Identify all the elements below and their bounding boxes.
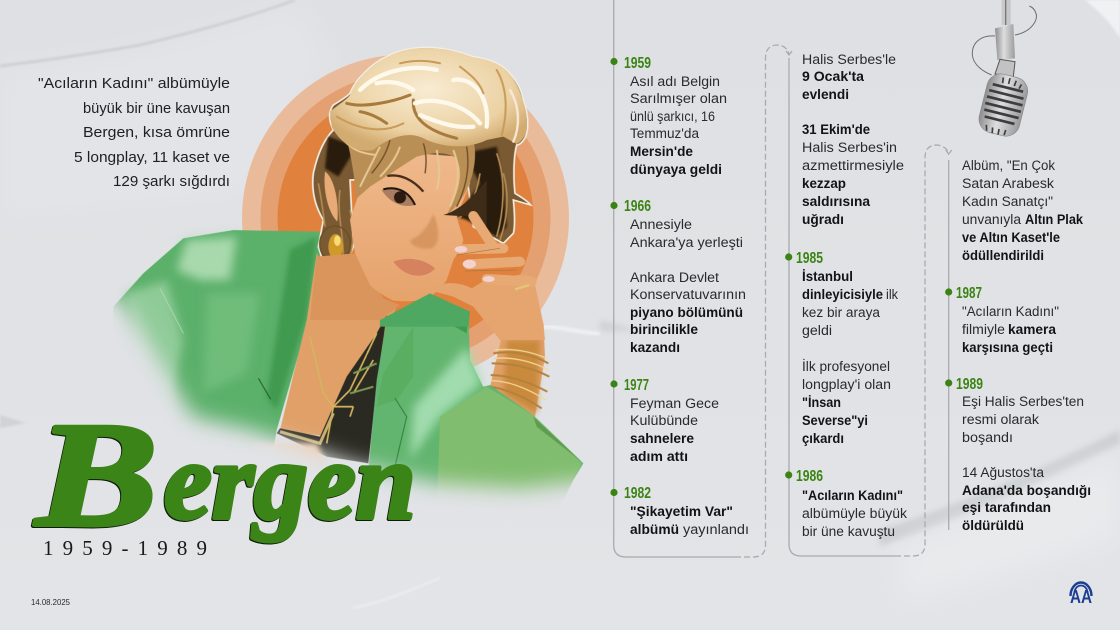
entry attack [802, 122, 904, 227]
intro text: 129 şarkı sığdırdı [113, 173, 230, 190]
fringe [343, 130, 475, 215]
entry 1984 marriage: 9 Ocak'ta [802, 69, 865, 84]
entry 1985: 1985 [796, 250, 823, 267]
entry 1959: Sarılmışer olan [630, 91, 727, 106]
entry 1987: filmiyle [962, 322, 1005, 337]
subtitle: years: 1959-1989 [43, 536, 207, 560]
entry 1985: çıkardı [802, 431, 844, 446]
entry 1977: Feyman Gece [630, 396, 719, 411]
title: Bergen: ergen [164, 420, 416, 542]
hair silhouette [313, 47, 531, 263]
intro text: büyük bir üne kavuşan [83, 100, 230, 117]
entry 1966 [610, 198, 746, 355]
title: Bergen [34, 392, 416, 558]
entry 1982 [610, 485, 749, 537]
orange circle behind portrait [242, 54, 569, 382]
title: Bergen: B [34, 392, 158, 558]
entry 1985: İlk profesyonel [802, 359, 890, 374]
entry 1985 [785, 250, 898, 446]
entry 1959: ünlü şarkıcı, 16 [630, 109, 715, 124]
lips [393, 259, 435, 276]
entry 1966: Ankara'ya yerleşti [630, 235, 743, 250]
date: 14.08.2025 [31, 598, 71, 607]
intro text [38, 75, 230, 190]
jacket left panel [113, 230, 320, 445]
entry 1966: piyano bölümünü [630, 305, 743, 320]
intro text: 5 longplay, 11 kaset ve [74, 149, 230, 166]
neck [310, 253, 400, 320]
entry 1977: adım attı [630, 449, 688, 464]
neck and chest [280, 253, 397, 437]
portrait: woman in green jacket [113, 230, 583, 513]
strand over face [443, 180, 487, 227]
portrait head: hair and face [310, 47, 545, 340]
entry 1989: Eşi Halis Serbes'ten [962, 394, 1084, 409]
entry 1982: 1982 [624, 485, 651, 502]
nose [410, 213, 438, 249]
hand and fingers [432, 216, 545, 340]
entry 1959: Asıl adı Belgin [630, 74, 720, 89]
entry 1985: dinleyicisiyle [802, 287, 883, 302]
entry album award: Satan Arabesk [962, 176, 1054, 191]
entry 1985: "İnsan [802, 395, 841, 410]
entry 1987: "Acıların Kadını" [962, 304, 1059, 319]
entry attack: kezzap [802, 176, 846, 191]
entry 1989 [945, 376, 1091, 533]
entry 1985: kez bir araya [802, 305, 880, 320]
entry 1986: "Acıların Kadını" [802, 488, 903, 503]
entry 1977: Kulübünde [630, 413, 698, 428]
entry 1982: "Şikayetim Var" [630, 504, 733, 519]
entry album award: Altın Plak [1025, 212, 1083, 227]
entry album award: Kadın Sanatçı" [962, 194, 1053, 209]
entry 1982: yayınlandı [683, 522, 749, 537]
entry 1966: Ankara Devlet [630, 270, 719, 285]
timeline column 3 [945, 158, 1091, 533]
entry 1985: ilk [886, 287, 898, 302]
hair curls [337, 61, 518, 142]
logo: AA: AA [1070, 587, 1092, 607]
hair strands at sides [318, 153, 507, 260]
entry 1989: resmi olarak [962, 412, 1039, 427]
timeline column 1 [610, 55, 749, 537]
entry 1986: 1986 [796, 468, 823, 485]
wrist and bracelets [473, 307, 549, 427]
entry 1984 marriage [802, 52, 896, 102]
icon: vintage microphone [972, 0, 1036, 139]
entry album award [962, 158, 1083, 263]
intro text: Bergen, kısa ömrüne [83, 124, 230, 141]
entry 1959: dünyaya geldi [630, 162, 722, 177]
collar in front of neck [380, 293, 470, 327]
entry 1989: eşi tarafından [962, 500, 1051, 515]
entry attack: azmettirmesiyle [802, 158, 904, 173]
entry 1966: birincilikle [630, 322, 698, 337]
intro text: "Acıların Kadını" albümüyle [38, 75, 230, 92]
entry attack: 31 Ekim'de [802, 122, 870, 137]
entry 1977: 1977 [624, 377, 649, 394]
timeline connector lines [614, 0, 952, 557]
eye and brow [382, 175, 423, 206]
entry 1984 marriage: Halis Serbes'le [802, 52, 896, 67]
entry album award: ödüllendirildi [962, 248, 1044, 263]
entry 1986: albümüyle büyük [802, 506, 907, 521]
entry 1989: Adana'da boşandığı [962, 483, 1091, 498]
entry 1959: Mersin'de [630, 144, 693, 159]
entry 1989: 1989 [956, 376, 983, 393]
entry 1977 [610, 377, 719, 464]
entry 1987: kamera [1008, 322, 1056, 337]
entry 1987: karşısına geçti [962, 340, 1053, 355]
face [350, 153, 470, 301]
ear and earring [320, 172, 350, 262]
entry album award: ve Altın Kaset'le [962, 230, 1060, 245]
entry album award: Albüm, "En Çok [962, 158, 1055, 173]
dark hair shadows [325, 137, 507, 237]
dark blouse [277, 315, 387, 463]
entry 1959: 1959 [624, 55, 651, 72]
hand resting on chest [257, 439, 327, 466]
entry 1966: kazandı [630, 340, 680, 355]
entry 1989: öldürüldü [962, 518, 1024, 533]
hair top [330, 48, 527, 151]
jacket right panel and sleeve [368, 320, 584, 502]
entry 1989: boşandı [962, 430, 1013, 445]
entry 1987: 1987 [956, 285, 982, 302]
entry attack: Halis Serbes'in [802, 140, 897, 155]
entry 1982: albümü [630, 522, 679, 537]
entry 1959: Temmuz'da [630, 126, 699, 141]
entry 1985: geldi [802, 323, 832, 338]
entry 1985: İstanbul [802, 269, 853, 284]
entry 1986 [785, 468, 907, 539]
timeline column 2 [785, 52, 907, 539]
entry attack: saldırısına [802, 194, 870, 209]
entry 1987 [945, 285, 1059, 355]
entry 1966: Konservatuvarının [630, 287, 746, 302]
entry 1959 [610, 55, 727, 177]
entry 1985: longplay'i olan [802, 377, 891, 392]
entry attack: uğradı [802, 212, 844, 227]
entry 1986: bir üne kavuştu [802, 524, 895, 539]
entry 1977: sahnelere [630, 431, 694, 446]
entry 1984 marriage: evlendi [802, 87, 849, 102]
entry 1966: 1966 [624, 198, 651, 215]
entry 1985: Severse"yi [802, 413, 868, 428]
entry 1989: 14 Ağustos'ta [962, 465, 1044, 480]
entry album award: unvanıyla [962, 212, 1021, 227]
entry 1966: Annesiyle [630, 217, 692, 232]
